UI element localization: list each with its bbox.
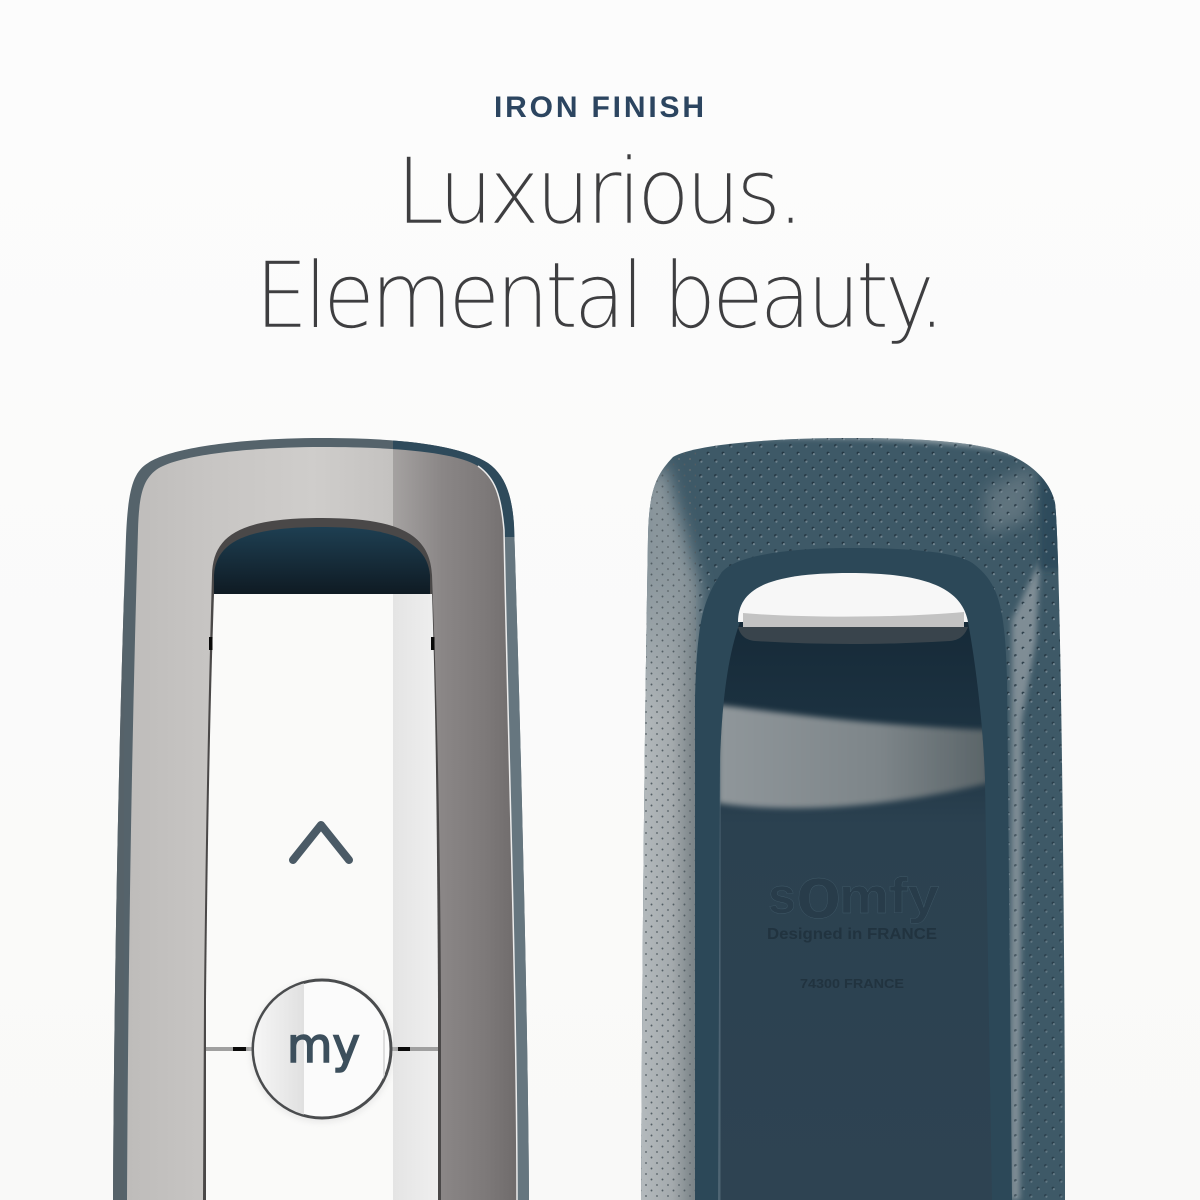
my label: my: [287, 1018, 360, 1074]
up arrow icon: [293, 825, 349, 860]
divider lines: [206, 1047, 438, 1051]
front remote, iron finish: [100, 430, 540, 1200]
front remote outer rim: [100, 430, 540, 1200]
embossed somfy logo: mfy: [839, 868, 939, 924]
back plate: [710, 620, 1000, 1200]
grey ledge: [743, 612, 964, 627]
inner rim: [695, 548, 1012, 1200]
embossed somfy logo: s: [768, 868, 796, 924]
silver face plate: [120, 440, 523, 1200]
main headline: [255, 140, 941, 349]
my button: [250, 979, 394, 1123]
button opening surround: [203, 518, 441, 1200]
side notches: [209, 637, 434, 650]
dark recess: [214, 527, 430, 594]
embossed text: 74300 FRANCE: 74300 FRANCE: [800, 976, 904, 991]
window opening: [738, 573, 968, 622]
eyebrow heading: IRON FINISH: IRON FINISH: [494, 91, 704, 124]
dark ledge: [738, 627, 968, 644]
embossed somfy logo: [768, 851, 939, 934]
headline line 1: Luxurious.: [396, 140, 800, 245]
back remote, textured shell: [636, 430, 1070, 1200]
embossed text: Designed in FRANCE: Designed in FRANCE: [767, 926, 937, 943]
headline line 2: Elemental beauty.: [255, 244, 941, 349]
textured shell: [636, 430, 1070, 1200]
embossed somfy logo: o: [796, 851, 841, 934]
white button panel: [200, 590, 443, 1200]
face edge highlight: [478, 466, 517, 1200]
reflection: [718, 705, 988, 808]
